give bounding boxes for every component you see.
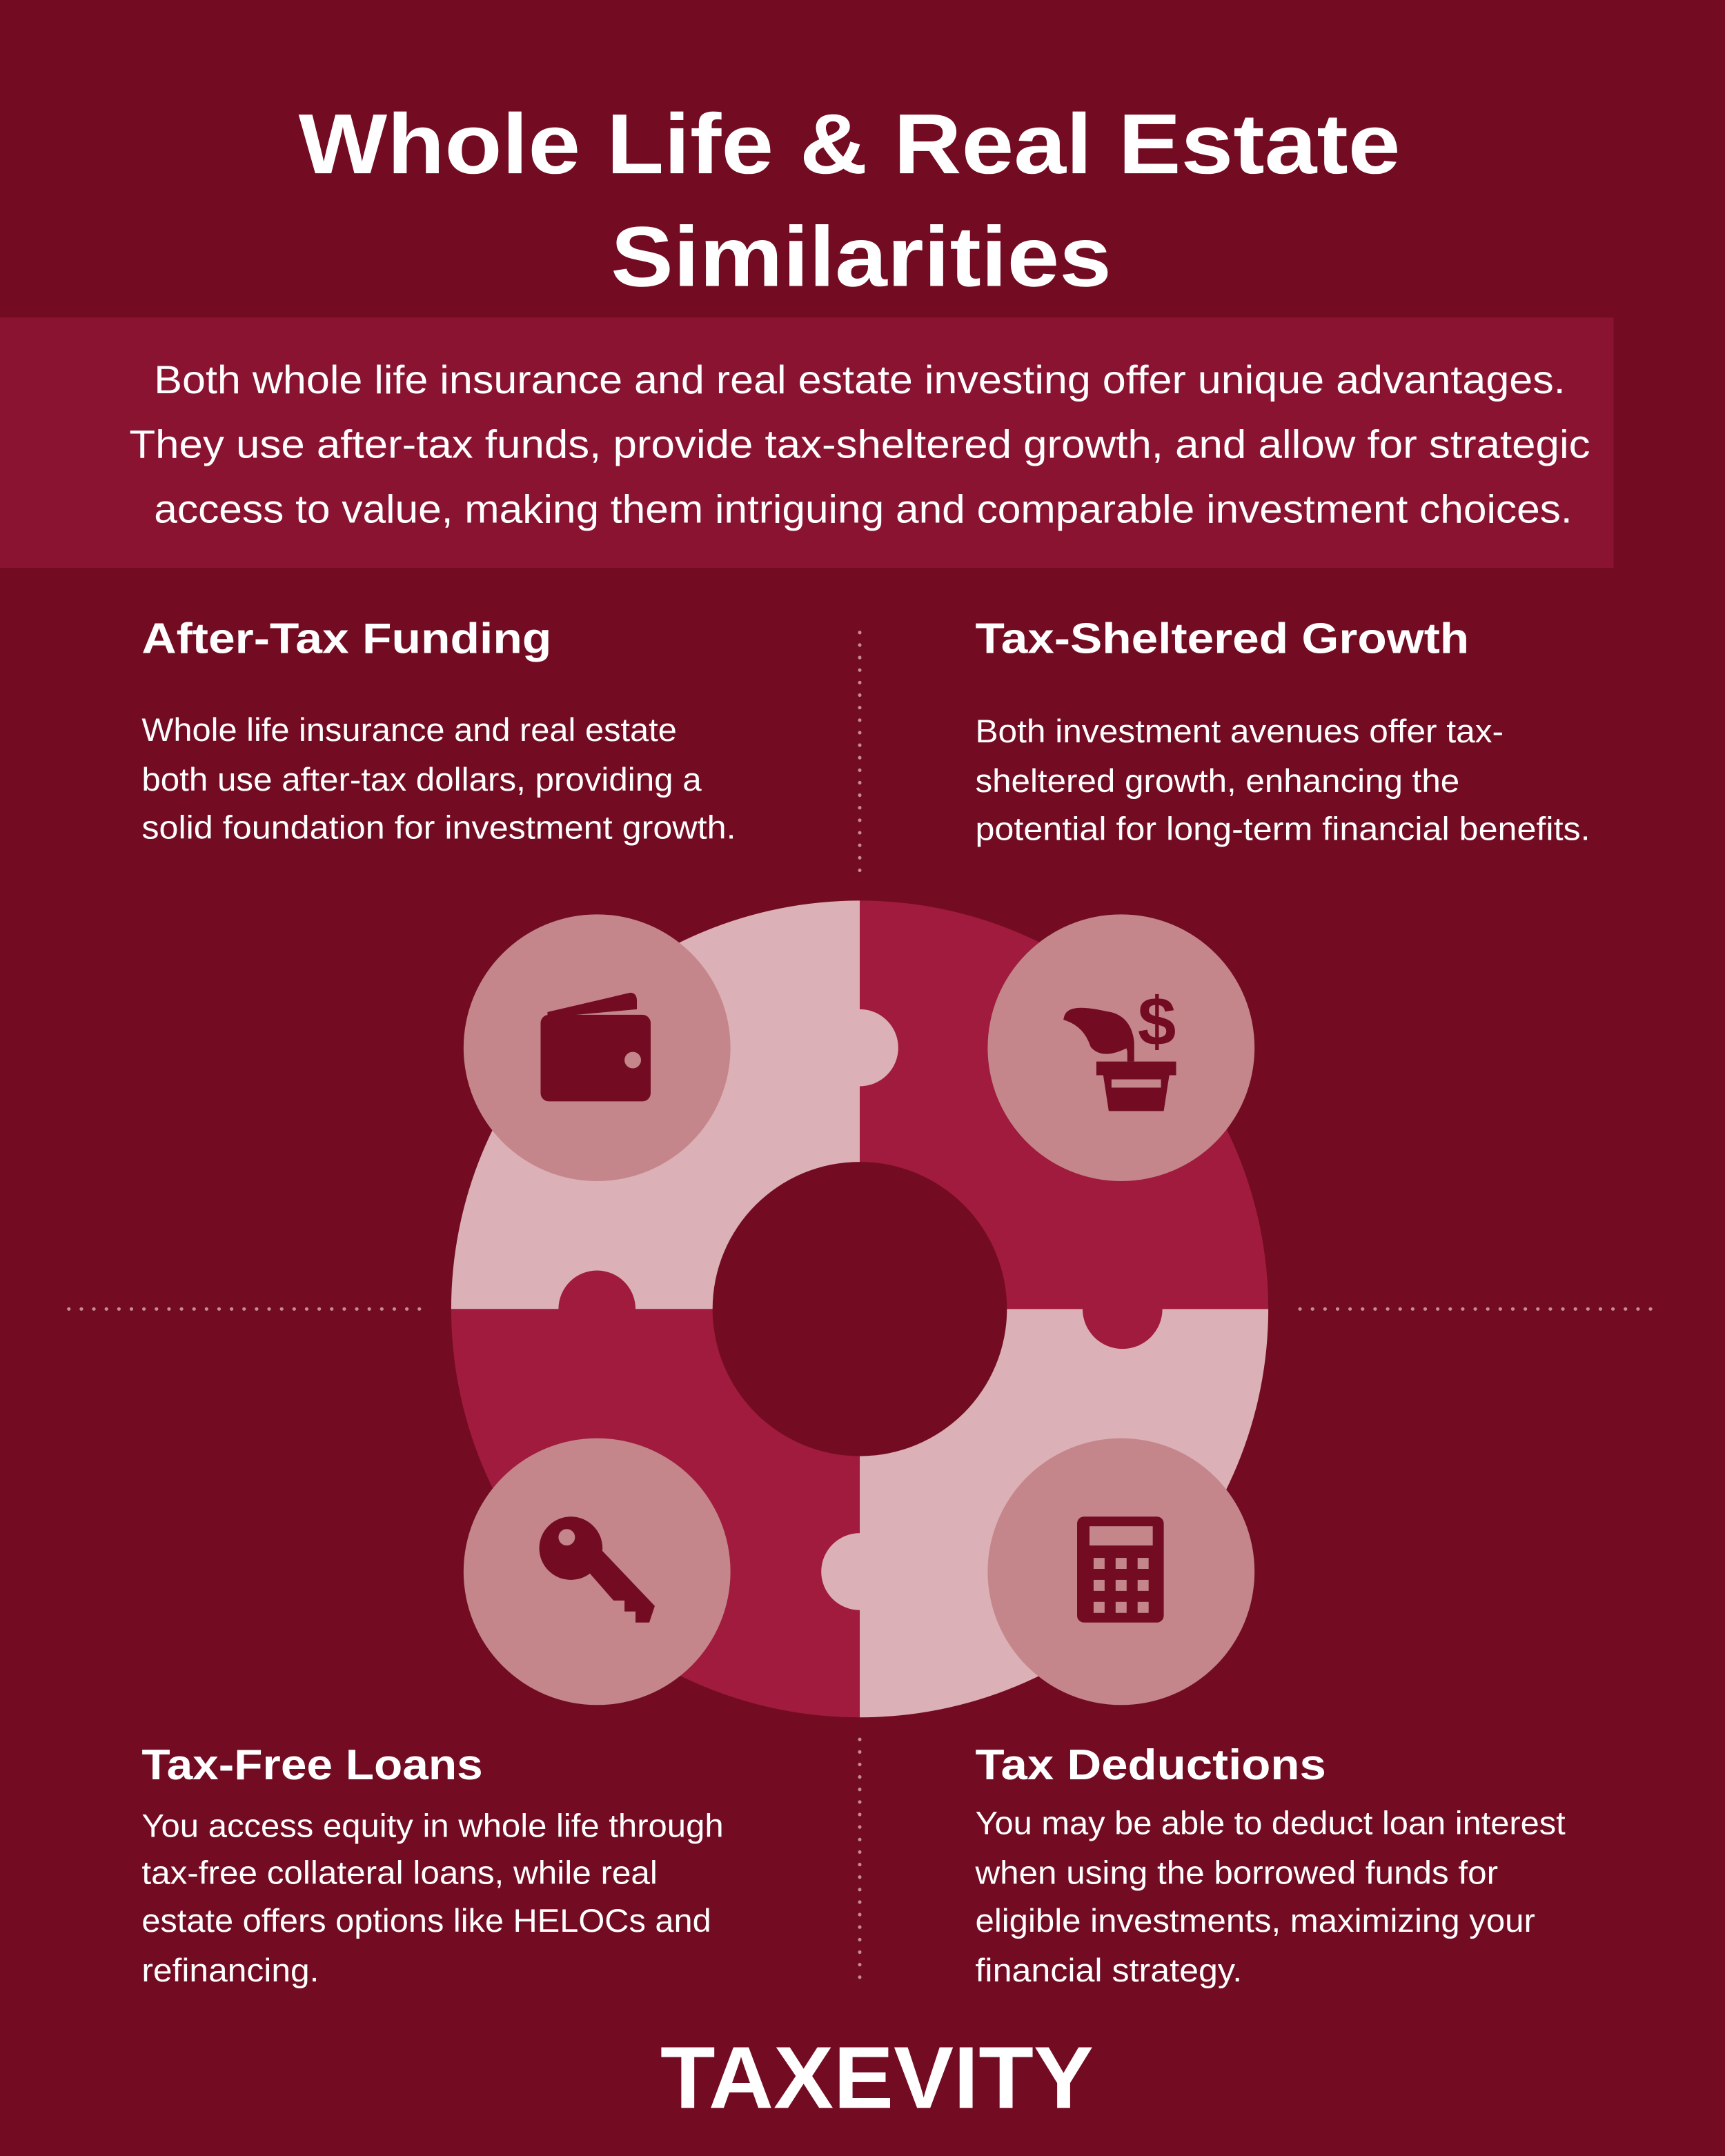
intro band: access to value, making them intriguing and comparable investment choices. [154,487,1573,531]
panel: after-tax funding: Whole life insurance and real estate [141,712,677,748]
panel: tax-sheltered growth: Both investment avenues offer tax- [975,713,1504,749]
panel: after-tax funding: After-Tax Funding [141,615,551,663]
title [299,97,1401,305]
panel: tax deductions: eligible investments, maximizing your [975,1903,1535,1939]
puzzle chart [451,900,1268,1717]
panel: after-tax funding: both use after-tax dollars, providing a [141,762,702,798]
panel: tax-sheltered growth: potential for long-term financial benefits. [975,811,1590,847]
icon: calculator [1077,1516,1164,1623]
intro band: They use after-tax funds, provide tax-sheltered growth, and allow for strategic [129,423,1590,467]
panel: tax-free loans: estate offers options like HELOCs and [141,1903,711,1939]
panel: after-tax funding: solid foundation for investment growth. [141,810,736,846]
icon: plant with dollar [1067,984,1176,1111]
intro band: Both whole life insurance and real estate investing offer unique advantages. [154,358,1566,402]
panel: tax-free loans: Tax-Free Loans [141,1741,483,1789]
title: Similarities [611,210,1112,305]
panel: after-tax funding [141,615,736,846]
panel: tax-free loans [141,1741,724,1988]
panel: tax deductions: financial strategy. [975,1952,1242,1988]
panel: tax deductions: You may be able to deduct loan interest [975,1806,1566,1841]
panel: tax deductions: when using the borrowed funds for [974,1855,1498,1890]
intro band [0,317,1614,568]
panel: tax-sheltered growth: Tax-Sheltered Growth [975,615,1469,663]
icon: key [539,1516,655,1623]
panel: tax-free loans: tax-free collateral loans, while real [141,1855,658,1890]
icon: wallet [540,993,651,1101]
icon: plant with dollar: $ [1138,984,1176,1060]
panel: tax-free loans: You access equity in whole life through [141,1808,724,1844]
panel: tax deductions [974,1741,1566,1988]
panel: tax-sheltered growth: sheltered growth, enhancing the [975,763,1459,799]
panel: tax deductions: Tax Deductions [975,1741,1326,1789]
logo: TAXEVITY [660,2029,1094,2127]
panel: tax-sheltered growth [975,615,1590,847]
panel: tax-free loans: refinancing. [141,1952,319,1988]
title: Whole Life & Real Estate [299,97,1401,192]
